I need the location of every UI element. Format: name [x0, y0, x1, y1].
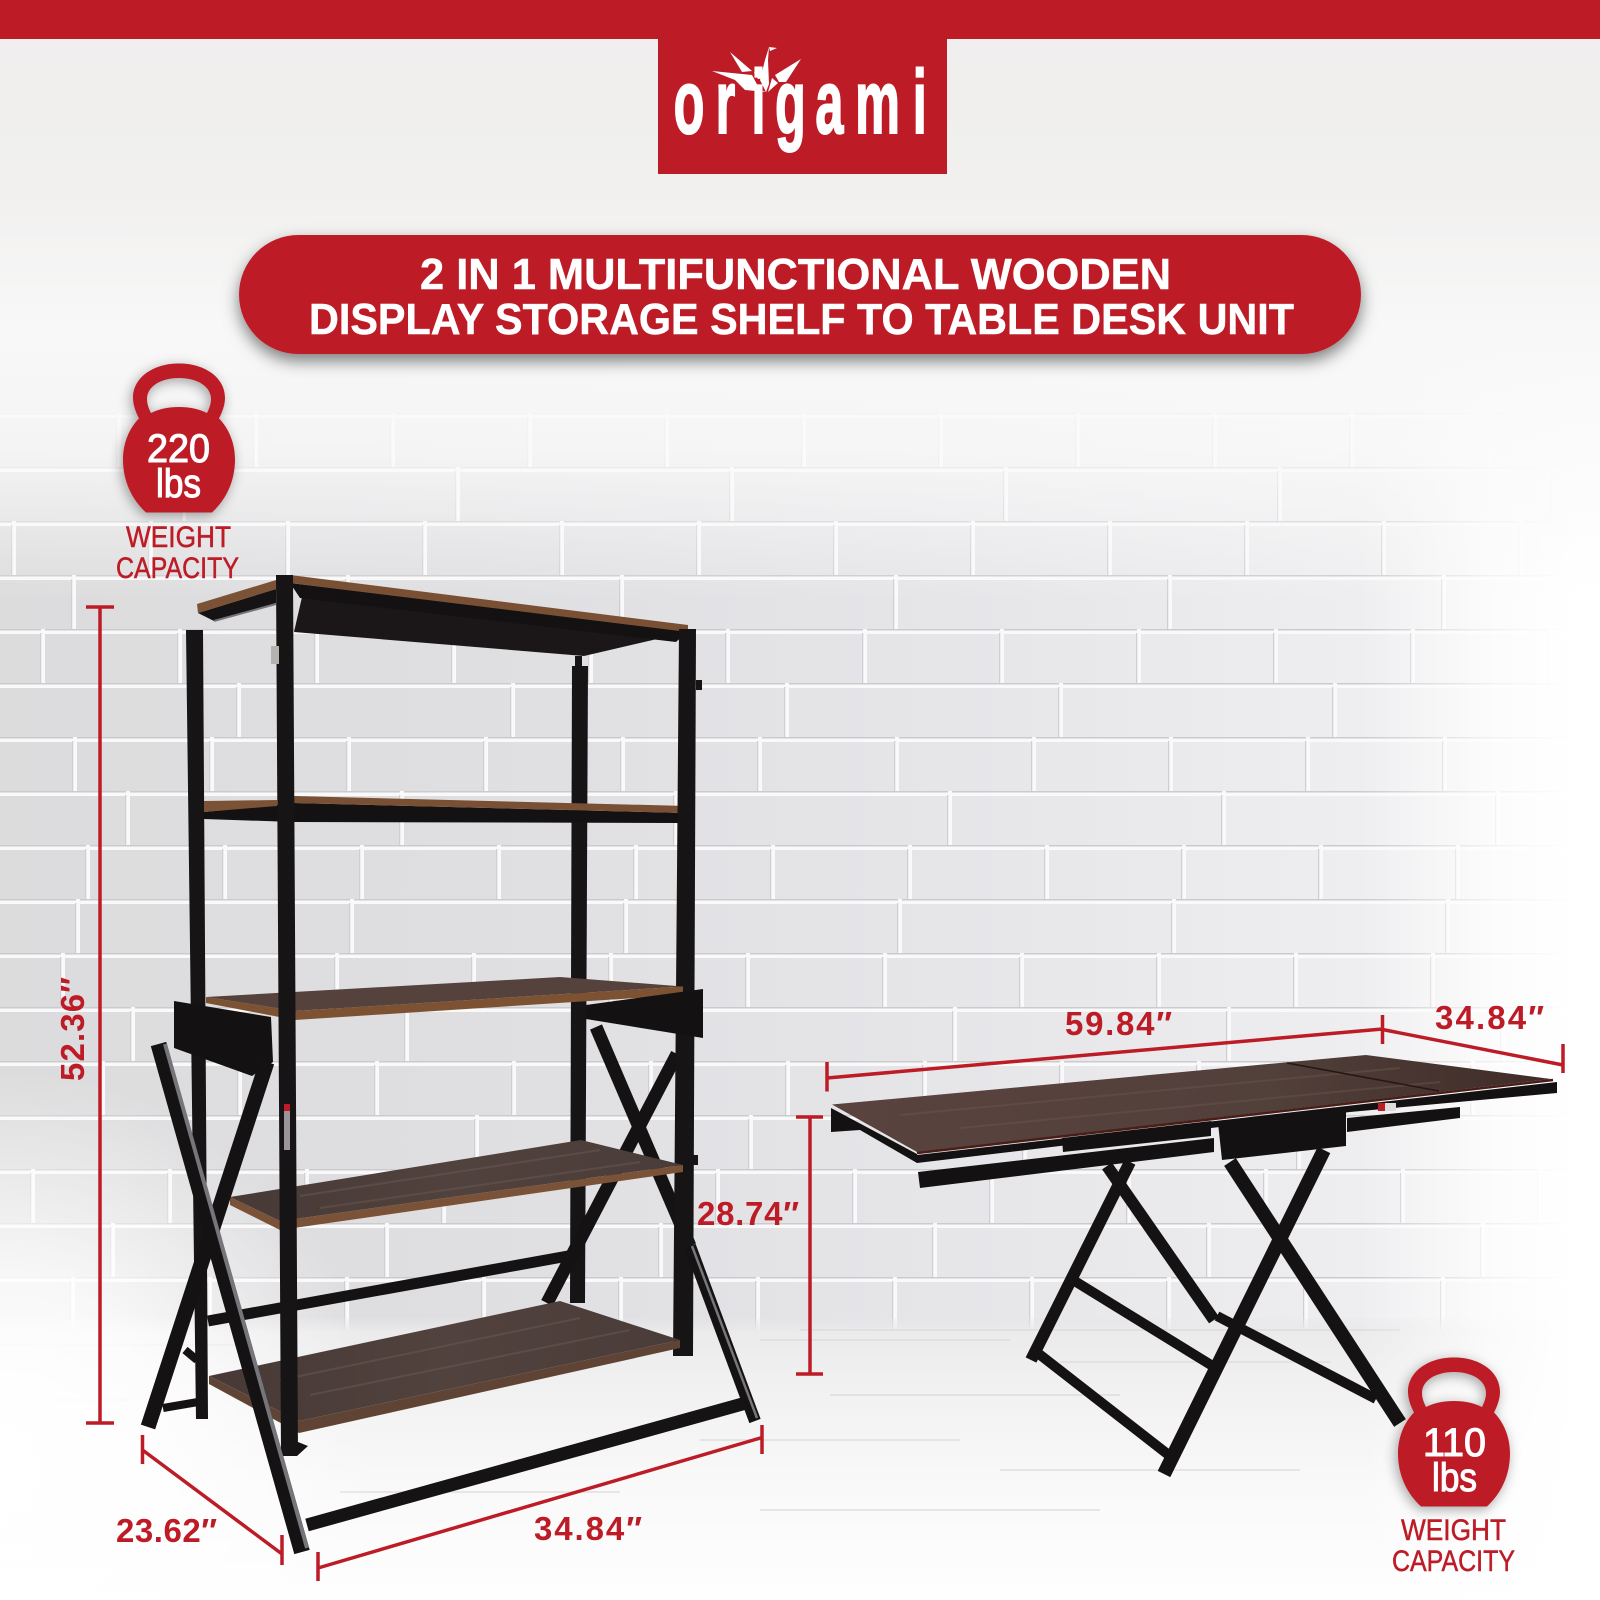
- icon: paper crane: [712, 47, 801, 92]
- logo: origami: [658, 39, 947, 174]
- dimension: width 34.84: 34.84″: [534, 1510, 642, 1547]
- product: shelf unit: [148, 575, 757, 1552]
- dimension: depth 23.62: [116, 1435, 282, 1565]
- left cross legs: [148, 1044, 307, 1552]
- badge: 110 lbs weight capacity: WEIGHT: [1401, 1514, 1506, 1547]
- dimension: table width 34.84: 34.84″: [1435, 999, 1544, 1036]
- logo: origami: origami: [674, 53, 927, 153]
- dimension: height 52.36: 52.36″: [54, 977, 91, 1081]
- title banner: [239, 235, 1361, 354]
- icon: kettlebell: [123, 364, 235, 512]
- table label: [1378, 1103, 1396, 1111]
- product: table unit: [831, 1055, 1557, 1474]
- dimension: depth 23.62: 23.62″: [116, 1512, 217, 1549]
- icon: kettlebell: [1398, 1358, 1510, 1506]
- right front post: [673, 629, 696, 1356]
- badge: 110 lbs weight capacity: lbs: [1432, 1456, 1477, 1500]
- shelf 1 top: [197, 575, 688, 656]
- right outer leg: [690, 1246, 757, 1421]
- shelf 2: [204, 796, 687, 823]
- badge: 110 lbs weight capacity: [1392, 1358, 1515, 1578]
- badge: 110 lbs weight capacity: 110: [1423, 1421, 1486, 1465]
- shelf 3: [206, 977, 683, 1020]
- badge: 220 lbs weight capacity: WEIGHT: [126, 521, 231, 554]
- dimension: table length 59.84: 59.84″: [1065, 1005, 1172, 1042]
- right rear cross braces: [547, 1027, 690, 1303]
- table apron and rails: [831, 1082, 1557, 1188]
- shelf 4: [230, 1140, 683, 1230]
- back rod: [208, 1256, 568, 1321]
- dimension: table length 59.84: [827, 1005, 1382, 1092]
- bracket left: [174, 1001, 273, 1076]
- title banner: DISPLAY STORAGE SHELF TO TABLE DESK UNIT: [309, 295, 1294, 344]
- title banner: 2 IN 1 MULTIFUNCTIONAL WOODEN: [420, 250, 1171, 299]
- dimension: table height 28.74: 28.74″: [697, 1195, 799, 1232]
- badge: 220 lbs weight capacity: 220: [147, 427, 210, 471]
- bottom rod: [307, 1403, 746, 1525]
- table legs: [1031, 1150, 1400, 1474]
- top red bar: [0, 0, 1600, 39]
- dimension: width 34.84: [318, 1425, 762, 1581]
- badge: 220 lbs weight capacity: lbs: [156, 462, 201, 506]
- dimension: table height 28.74: [697, 1117, 823, 1374]
- dimension: table width 34.84: [1382, 999, 1563, 1073]
- shelf 5 bottom: [209, 1301, 680, 1433]
- back posts: [186, 630, 588, 1419]
- badge: 220 lbs weight capacity: CAPACITY: [116, 552, 239, 585]
- left front post: [276, 575, 298, 1454]
- badge: 220 lbs weight capacity: [116, 364, 239, 585]
- table top: [832, 1055, 1553, 1153]
- dimension: height 52.36: [54, 607, 114, 1423]
- badge: 110 lbs weight capacity: CAPACITY: [1392, 1545, 1515, 1578]
- bracket right: [586, 989, 703, 1038]
